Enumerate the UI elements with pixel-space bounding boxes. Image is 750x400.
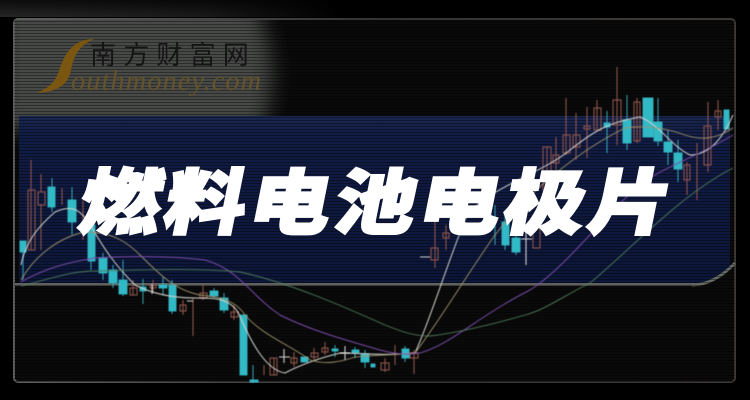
red candles <box>28 67 721 375</box>
white MA5 line <box>21 115 733 373</box>
logo: southmoney <box>36 35 262 97</box>
logo chinese name: 南方财富网 <box>90 35 256 72</box>
logo swoosh S <box>36 39 94 93</box>
cyan candles <box>20 95 729 383</box>
logo glow panel <box>0 0 272 130</box>
green MA60 line <box>21 168 733 336</box>
blue band panel <box>19 116 730 284</box>
tan MA10 line <box>21 127 733 363</box>
logo url: outhmoney.com <box>71 66 262 97</box>
white doji candles <box>152 225 532 363</box>
moving average lines <box>21 115 733 373</box>
purple MA20 line <box>21 135 733 354</box>
title: 燃料电池电极片 <box>72 147 687 249</box>
candlestick chart <box>20 67 729 383</box>
